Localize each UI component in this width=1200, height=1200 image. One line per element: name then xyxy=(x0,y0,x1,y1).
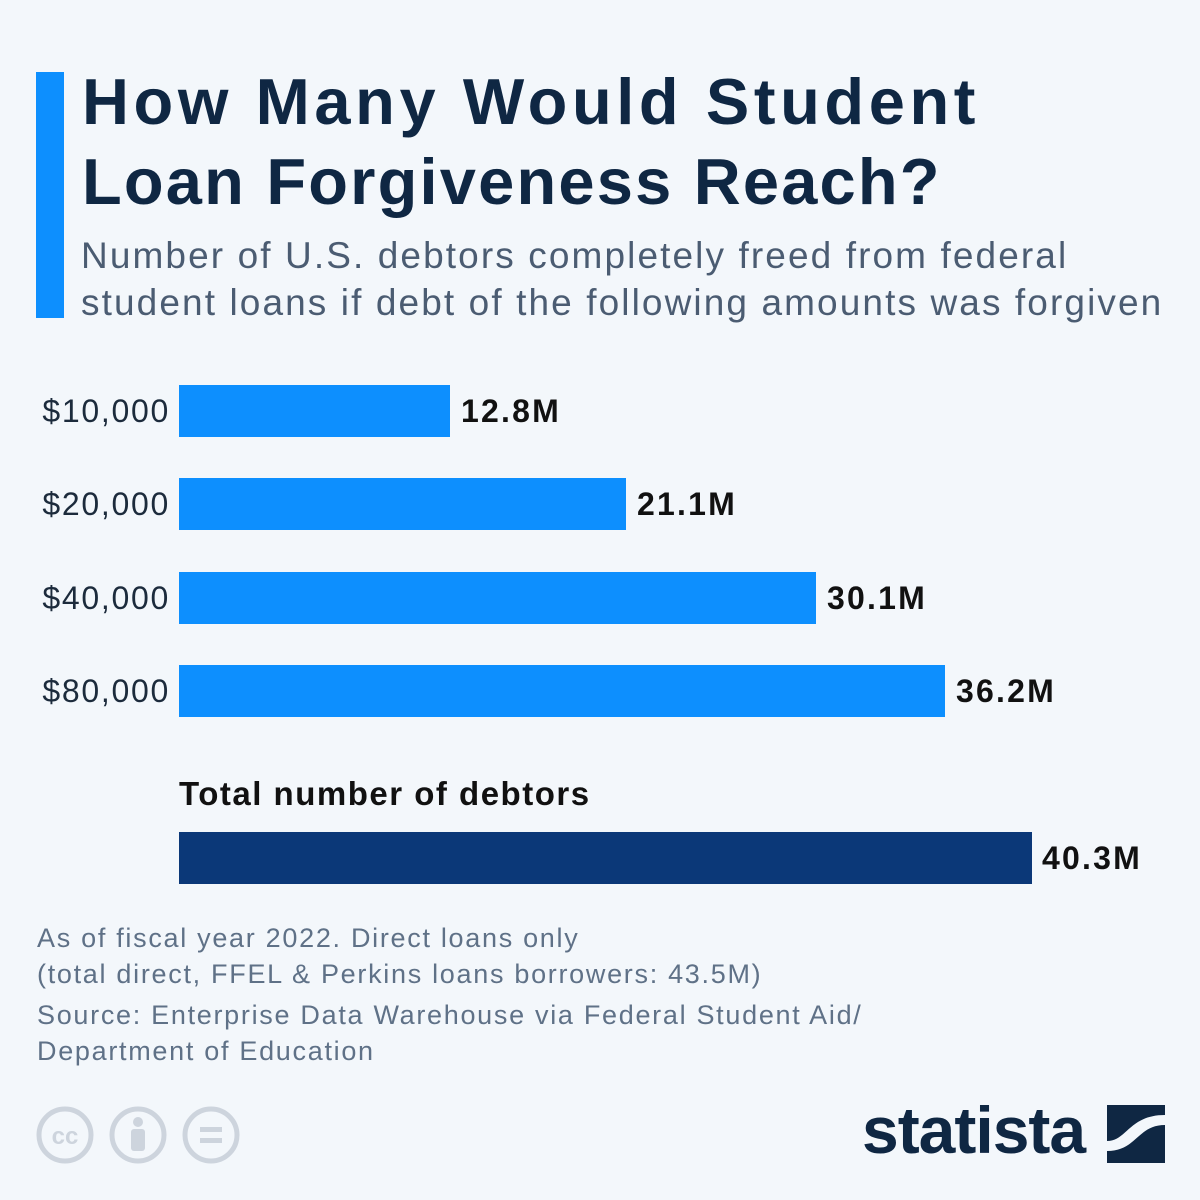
notes: As of fiscal year 2022. Direct loans only xyxy=(37,923,579,953)
icons: license xyxy=(36,1106,240,1164)
row: $80,000 xyxy=(42,665,1056,717)
notes xyxy=(37,923,762,989)
total heading: Total number of debtors xyxy=(179,775,591,812)
statista logo: statista xyxy=(862,1093,1085,1167)
title xyxy=(82,65,980,218)
row: $80,000: $80,000 xyxy=(42,673,170,709)
row: $80,000: 36.2M xyxy=(956,673,1056,709)
row: $10,000: 12.8M xyxy=(461,393,561,429)
row: $40,000: $40,000 xyxy=(42,580,170,616)
source: Source: Enterprise Data Warehouse via Federal Student Aid/ xyxy=(37,1000,862,1030)
source: Department of Education xyxy=(37,1036,375,1066)
notes: (total direct, FFEL & Perkins loans borrowers: 43.5M) xyxy=(37,959,762,989)
subtitle: student loans if debt of the following amounts was forgiven xyxy=(81,282,1163,323)
row: $40,000 xyxy=(42,572,927,624)
row: $40,000: 30.1M xyxy=(827,580,927,616)
row: $10,000 xyxy=(42,385,561,437)
row: $10,000: $10,000 xyxy=(42,393,170,429)
total bar: 40.3M xyxy=(1042,840,1142,876)
icons: license: cc xyxy=(52,1123,78,1150)
row: $20,000: $20,000 xyxy=(42,486,170,522)
title: Loan Forgiveness Reach? xyxy=(82,145,942,218)
title: How Many Would Student xyxy=(82,65,980,138)
source xyxy=(37,1000,862,1066)
subtitle: Number of U.S. debtors completely freed from federal xyxy=(81,235,1068,276)
bar chart xyxy=(42,385,1142,884)
subtitle xyxy=(81,235,1163,323)
row: $20,000 xyxy=(42,478,737,530)
row: $20,000: 21.1M xyxy=(637,486,737,522)
total bar xyxy=(179,832,1142,884)
accent bar xyxy=(36,72,64,318)
